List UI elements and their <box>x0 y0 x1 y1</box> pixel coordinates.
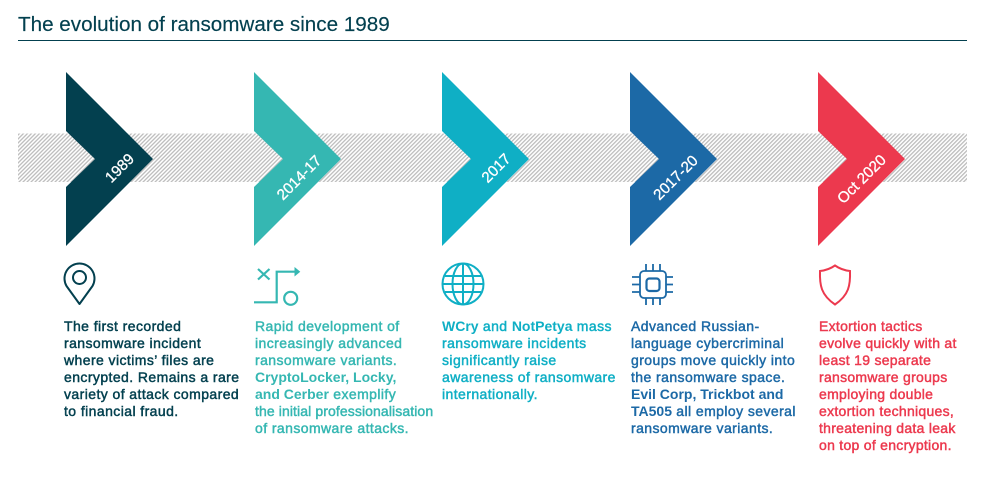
text block: Oct 2020: employing double <box>819 386 933 402</box>
text block: 2017-20: ransomware variants. <box>631 420 773 436</box>
text block: 2017: WCry and NotPetya mass <box>442 318 612 334</box>
arrow: 1989 <box>66 72 153 246</box>
text block: Oct 2020: ransomware groups <box>819 369 947 385</box>
arrow: Oct 2020 <box>818 72 905 246</box>
text block: Oct 2020: evolve quickly with at <box>819 335 957 351</box>
text block: 2014-17: and Cerber exemplify <box>255 386 396 402</box>
arrow: 2014-17: 2014-17 <box>274 152 325 204</box>
text block: 1989: to financial fraud. <box>64 403 179 419</box>
arrow: 1989: 1989 <box>102 151 138 186</box>
text block: 2014-17: of ransomware attacks. <box>255 420 409 436</box>
icon: map pin <box>64 264 95 304</box>
text block: Oct 2020: threatening data leak <box>819 420 956 436</box>
text block: 2017 <box>442 318 616 402</box>
icon: globe <box>442 264 484 304</box>
text block: Oct 2020: on top of encryption. <box>819 437 952 453</box>
text block: 2017: internationally. <box>442 386 538 402</box>
text block: 2017-20: the ransomware space. <box>631 369 785 385</box>
text block: 1989: The first recorded <box>64 318 181 334</box>
text block: Oct 2020 <box>819 318 957 454</box>
icon: shield <box>820 266 850 304</box>
text block: 2017-20: Advanced Russian- <box>631 318 760 334</box>
text block: 2014-17: increasingly advanced <box>255 335 402 351</box>
text block: 1989: where victims’ files are <box>64 352 214 368</box>
text block: 2017-20: TA505 all employ several <box>631 403 796 419</box>
text block: 1989 <box>64 318 239 419</box>
icon: microchip <box>632 264 673 305</box>
text block: 2017: awareness of ransomware <box>442 369 616 385</box>
text block: 2017-20: language cybercriminal <box>631 335 784 351</box>
arrow: 2017-20: 2017-20 <box>650 152 702 204</box>
text block: 2017-20 <box>630 318 796 436</box>
text block: Oct 2020: Extortion tactics <box>819 318 923 334</box>
text block: 2017-20: Evil Corp, Trickbot and <box>631 386 783 402</box>
text block: Oct 2020: extortion techniques, <box>819 403 954 419</box>
arrow: 2017: 2017 <box>479 151 514 186</box>
text block: 1989: variety of attack compared <box>64 386 239 402</box>
text block: 1989: encrypted. Remains a rare <box>64 369 239 385</box>
text block: 2014-17 <box>255 318 433 436</box>
text block: 2014-17: ransomware variants. <box>255 352 397 368</box>
text block: 2014-17: the initial professionalisation <box>255 403 433 419</box>
text block: 2014-17: CryptoLocker, Locky, <box>255 369 396 385</box>
hatched timeline band <box>18 134 967 182</box>
arrow: Oct 2020: Oct 2020 <box>834 152 890 207</box>
icon: strategy path <box>254 268 300 305</box>
arrow: 2017 <box>442 72 529 246</box>
text block: 2014-17: Rapid development of <box>255 318 400 334</box>
text block: 2017-20: groups move quickly into <box>631 352 795 368</box>
text block: 2017: significantly raise <box>442 352 557 368</box>
text block: Oct 2020: least 19 separate <box>819 352 931 368</box>
text block: 1989: ransomware incident <box>64 335 201 351</box>
arrow: 2017-20 <box>630 72 717 246</box>
text block: 2017: ransomware incidents <box>442 335 587 351</box>
title: The evolution of ransomware since 1989 <box>18 12 390 36</box>
arrow: 2014-17 <box>254 72 341 246</box>
